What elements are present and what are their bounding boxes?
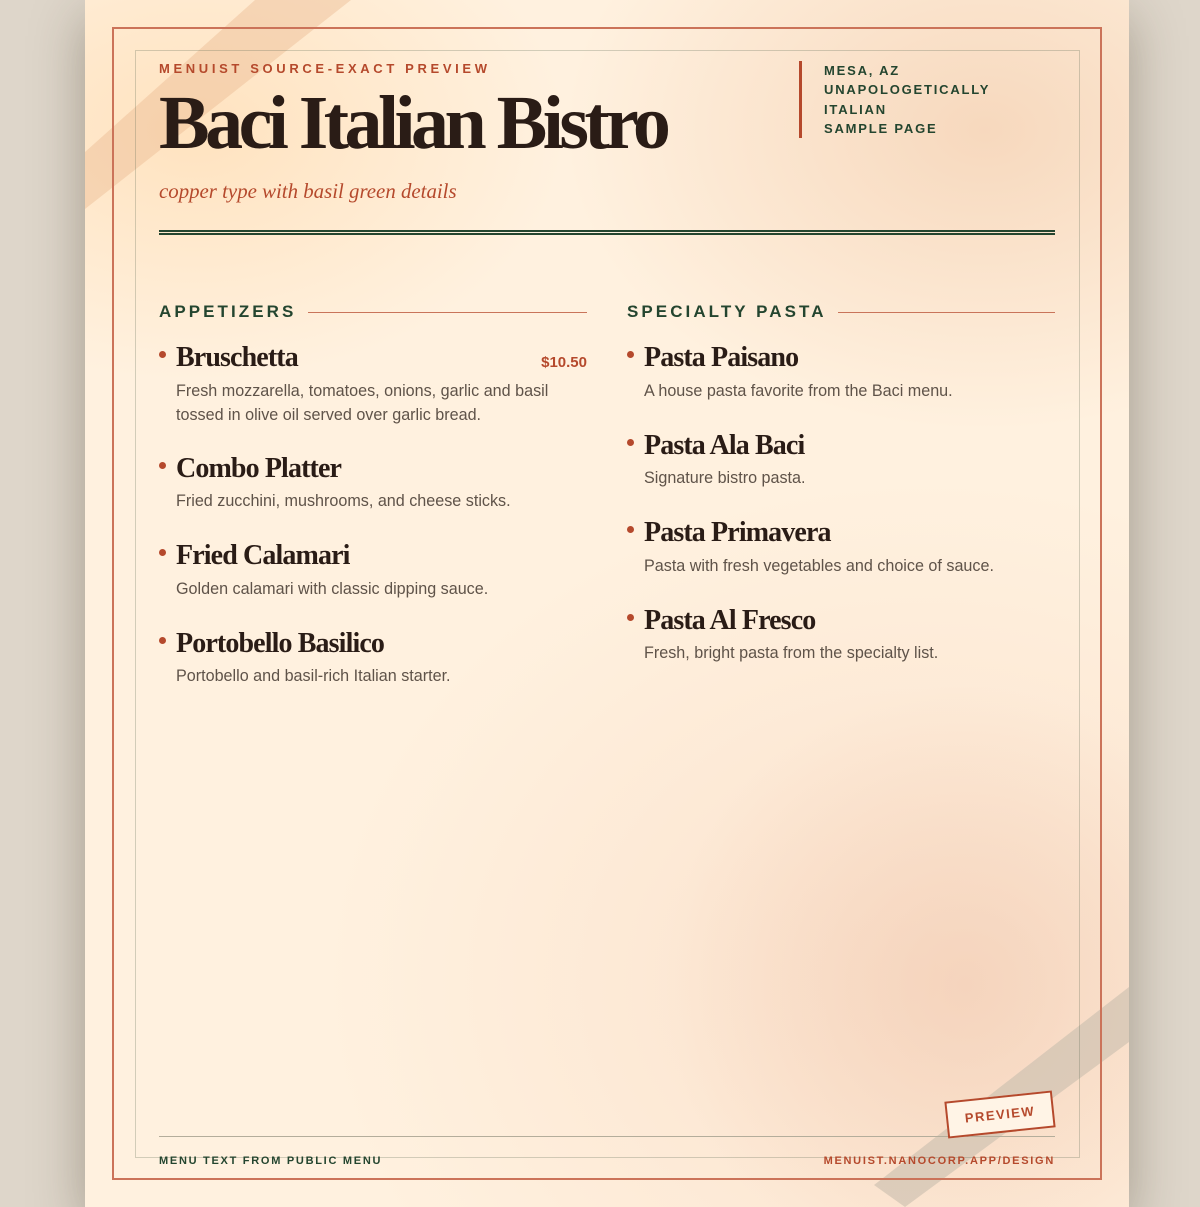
footer right text: MENUIST.NANOCORP.APP/DESIGN — [824, 1155, 1055, 1167]
heading rule — [308, 312, 587, 313]
item: Combo Platter — [159, 453, 511, 510]
title: Baci Italian Bistro — [159, 81, 666, 165]
location block: MESA, AZ — [824, 63, 900, 78]
item: Pasta Paisano: Pasta Paisano — [644, 342, 798, 373]
header double rule — [159, 230, 1055, 235]
eyebrow: MENUIST SOURCE-EXACT PREVIEW — [159, 61, 491, 76]
item: Pasta Al Fresco — [627, 605, 938, 662]
item: Pasta Paisano — [627, 342, 953, 400]
outer copper frame — [112, 27, 1102, 1180]
location block: SAMPLE PAGE — [824, 121, 937, 136]
item: Pasta Primavera: Pasta with fresh vegetables and choice of sauce. — [644, 557, 994, 575]
item: Portobello Basilico: Portobello and basil-rich Italian starter. — [176, 667, 451, 685]
item: Bruschetta: Fresh mozzarella, tomatoes, onions, garlic and basil — [176, 382, 548, 400]
item: Pasta Al Fresco: Pasta Al Fresco — [644, 605, 815, 636]
heading: specialty pasta: SPECIALTY PASTA — [627, 302, 827, 321]
item: Portobello Basilico: Portobello Basilico — [176, 628, 384, 659]
item: Pasta Primavera: Pasta Primavera — [644, 517, 831, 548]
panel: appetizers — [159, 302, 587, 685]
location block: UNAPOLOGETICALLY — [824, 82, 990, 97]
heading rule — [838, 312, 1055, 313]
panel: specialty pasta — [627, 302, 1055, 662]
item: Bruschetta: Bruschetta — [176, 342, 298, 373]
item: Pasta Ala Baci — [627, 430, 806, 487]
preview stamp — [944, 1090, 1056, 1139]
item: Bruschetta: tossed in olive oil served over garlic bread. — [176, 406, 481, 424]
item: Pasta Primavera — [627, 517, 994, 575]
heading: appetizers: APPETIZERS — [159, 302, 296, 321]
item: Pasta Ala Baci: Signature bistro pasta. — [644, 469, 806, 487]
item: Fried Calamari: Fried Calamari — [176, 540, 350, 571]
item: Portobello Basilico — [159, 628, 451, 685]
item: Pasta Paisano: A house pasta favorite from the Baci menu. — [644, 382, 953, 400]
item: Pasta Al Fresco: Fresh, bright pasta from the specialty list. — [644, 644, 938, 662]
inner green frame — [135, 50, 1080, 1158]
item: Pasta Ala Baci: Pasta Ala Baci — [644, 430, 804, 461]
location block: ITALIAN — [824, 102, 887, 117]
item: Bruschetta — [159, 342, 587, 424]
footer rule — [159, 1136, 1055, 1137]
item: Bruschetta: $10.50 — [541, 354, 587, 371]
item: Combo Platter: Combo Platter — [176, 453, 341, 484]
item: Combo Platter: Fried zucchini, mushrooms, and cheese sticks. — [176, 492, 511, 510]
item: Fried Calamari: Golden calamari with classic dipping sauce. — [176, 580, 488, 598]
footer left text: MENU TEXT FROM PUBLIC MENU — [159, 1155, 382, 1167]
item: Fried Calamari — [159, 540, 488, 598]
tagline: copper type with basil green details — [159, 179, 457, 203]
preview stamp: PREVIEW — [964, 1103, 1036, 1126]
location block — [799, 61, 990, 138]
